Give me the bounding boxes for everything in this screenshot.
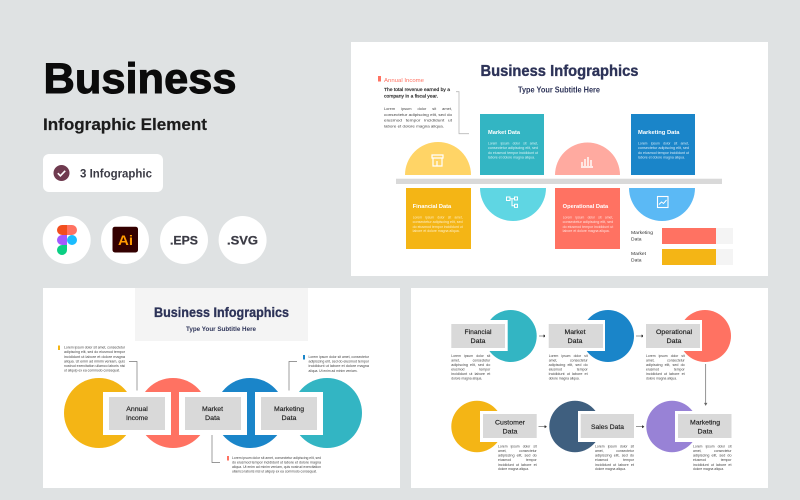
step: Market Data: amet, consectetur <box>549 358 589 362</box>
step: Financial Data: dolore magna aliqua. <box>451 377 482 381</box>
subheading: Type Your Subtitle Here <box>518 86 600 95</box>
note: bottom <box>227 456 321 474</box>
title: Business: Business <box>44 55 236 103</box>
card: Market Data: Market Data <box>488 130 521 136</box>
semicircle: sky with line chart icon <box>629 188 695 221</box>
arrow <box>636 426 644 428</box>
arrow: down <box>705 364 707 405</box>
step: Marketing Data <box>646 401 733 471</box>
card: Marketing Data: Marketing Data <box>638 130 680 136</box>
annual income note: eiusmod tempor incididunt ut <box>384 118 453 123</box>
box: Marketing Data: Data <box>282 415 297 422</box>
card: Marketing Data: consectetur adipiscing elit, sed <box>638 146 689 150</box>
box: Marketing Data: Marketing <box>274 406 304 413</box>
semicircle: yellow with shop icon <box>405 142 471 175</box>
card: Operational Data: Lorem ipsum dolor sit amet, <box>563 215 613 219</box>
card: Financial Data: do eiusmod tempor incididunt ut <box>413 225 463 229</box>
divider bar <box>396 179 722 184</box>
card: Financial Data: Financial Data <box>413 204 452 210</box>
annual income note: labore et dolore magna aliqua. <box>384 124 444 129</box>
card: Market Data <box>480 114 544 175</box>
step: Marketing Data: dolore magna aliqua. <box>693 467 724 471</box>
step: Market Data: adipiscing elit, sed do <box>549 363 588 367</box>
icon: Adobe Illustrator: Ai <box>118 232 133 248</box>
header block <box>135 288 308 341</box>
card: Marketing Data: do eiusmod tempor incididunt ut <box>638 151 689 155</box>
step: Market Data: Lorem ipsum dolor sit <box>549 354 588 358</box>
step: Operational Data: amet, consectetur <box>646 358 686 362</box>
note: upper right: incididunt ut labore et dolore magna <box>308 364 369 368</box>
badge: 3 Infographic: 3 Infographic <box>80 166 152 180</box>
card: Market Data: labore et dolore magna aliqua. <box>488 155 535 159</box>
step: Sales Data: amet, consectetur <box>595 449 635 453</box>
step: Customer Data: Data <box>502 428 518 436</box>
box: Annual Income: Annual <box>126 406 148 413</box>
card: Marketing Data <box>631 114 695 175</box>
circle: coral <box>138 378 208 448</box>
circle: teal <box>292 378 362 448</box>
step: Customer Data: incididunt ut labore et <box>498 463 537 467</box>
step: Customer Data <box>451 401 540 471</box>
arrow <box>636 335 644 337</box>
box: Annual Income: Income <box>126 415 148 422</box>
note: bottom: aliqua. Ut enim ad minim veniam, quis nostrud exercitation <box>232 465 321 469</box>
note: upper left: Lorem ipsum dolor sit amet, consectetur <box>64 346 126 350</box>
card: Financial Data: consectetur adipiscing elit, sed <box>413 220 463 224</box>
header block: Type Your Subtitle Here <box>186 326 256 333</box>
card: Market Data: do eiusmod tempor incididunt ut <box>488 151 538 155</box>
step: Sales Data <box>549 401 636 471</box>
card: Financial Data: labore et dolore magna aliqua. <box>413 229 460 233</box>
step: Financial Data: incididunt ut labore et <box>451 372 490 376</box>
circle: yellow <box>64 378 134 448</box>
note: bottom: ullamco laboris nisi ut aliquip ex ea commodo consequat. <box>232 470 317 474</box>
step: Market Data: dolore magna aliqua. <box>549 377 580 381</box>
step: Operational Data: Data <box>666 338 682 345</box>
annual income note: consectetur adipiscing elit, sed do <box>384 112 453 117</box>
bar chart: Marketing <box>631 230 653 235</box>
heading: Business Infographics <box>480 63 638 80</box>
card: Operational Data <box>555 188 620 249</box>
step: Customer Data: adipiscing elit, sed do <box>498 454 537 458</box>
step: Operational Data: dolore magna aliqua. <box>646 377 677 381</box>
card: Marketing Data: labore et dolore magna aliqua. <box>638 155 685 159</box>
annual income note: Annual Income <box>384 78 424 84</box>
step: Operational Data: Lorem ipsum dolor sit <box>646 354 685 358</box>
step: Marketing Data: Lorem ipsum dolor sit <box>693 444 732 448</box>
note: upper right: adipiscing elit, sed do eiusmod tempor <box>308 360 370 364</box>
annual income note: company in a fiscal year. <box>384 94 438 100</box>
step: Market Data: Data <box>568 338 583 345</box>
card: Financial Data: Lorem ipsum dolor sit amet, <box>413 215 463 219</box>
card: Marketing Data: Lorem ipsum dolor sit amet, <box>638 141 689 145</box>
connector lines <box>129 362 297 462</box>
note: upper left: adipiscing elit, sed do eiusmod tempor <box>64 350 126 354</box>
badge: 3 Infographic <box>43 154 163 192</box>
card: Market Data: consectetur adipiscing elit, sed <box>488 146 538 150</box>
card: Financial Data <box>406 188 471 249</box>
step: Sales Data: incididunt ut labore et <box>595 463 634 467</box>
bar chart <box>631 228 733 265</box>
step: Market Data <box>545 310 634 381</box>
icon: EPS: .EPS <box>170 234 198 248</box>
box: Market Data: Data <box>205 415 220 422</box>
card: Operational Data: labore et dolore magna aliqua. <box>563 229 610 233</box>
icon: SVG <box>219 216 267 264</box>
step: Sales Data: Sales Data <box>591 424 624 431</box>
step: Sales Data: eiusmod tempor <box>595 458 635 462</box>
step: Operational Data: eiusmod tempor <box>646 368 686 372</box>
step: Market Data: eiusmod tempor <box>549 368 589 372</box>
note: upper left: aliqua. Ut enim ad minim veniam, quis <box>64 360 125 364</box>
panel: linked circles infographic <box>43 288 400 488</box>
note: upper left <box>58 346 126 372</box>
step: Customer Data: Lorem ipsum dolor sit <box>498 444 537 448</box>
box: Market Data <box>179 392 247 435</box>
step: Customer Data: dolore magna aliqua. <box>498 467 529 471</box>
note: upper left: nostrud exercitation ullamco laboris nisi <box>64 364 125 368</box>
step: Sales Data: Lorem ipsum dolor sit <box>595 444 634 448</box>
step: Customer Data: Customer <box>495 420 526 426</box>
note: upper right <box>303 355 370 373</box>
step: Marketing Data: Data <box>698 428 713 436</box>
step: Marketing Data: adipiscing elit, sed do <box>693 454 732 458</box>
step: Financial Data: adipiscing elit, sed do <box>451 363 490 367</box>
arrow <box>539 335 546 337</box>
step: Marketing Data: eiusmod tempor <box>693 458 732 462</box>
icon: EPS <box>160 216 208 264</box>
step: Financial Data: amet, consectetur <box>451 358 491 362</box>
annual income note <box>378 76 453 129</box>
step: Sales Data: adipiscing elit, sed do <box>595 454 634 458</box>
step: Operational Data <box>643 310 731 381</box>
note: bottom: do eiusmod tempor incididunt ut labore et dolore magna <box>232 460 321 464</box>
icon: Figma <box>43 216 91 264</box>
box: Market Data: Market <box>202 406 223 413</box>
step: Market Data: Market <box>564 329 586 336</box>
bar chart: Data <box>631 236 642 242</box>
icon: Adobe Illustrator <box>101 216 149 264</box>
panel: process flow infographic <box>411 288 768 488</box>
annual income note: Lorem ipsum dolor sit amet, <box>384 106 452 111</box>
note: upper right: aliqua. Ut enim ad minim veniam. <box>308 369 358 373</box>
step: Sales Data: dolore magna aliqua. <box>595 467 626 471</box>
step: Operational Data: incididunt ut labore et <box>646 372 685 376</box>
note: upper right: Lorem ipsum dolor sit amet, consectetur <box>308 355 370 359</box>
step: Marketing Data: incididunt ut labore et <box>693 463 732 467</box>
card: Market Data: Lorem ipsum dolor sit amet, <box>488 141 538 145</box>
header block: Business Infographics <box>154 305 289 320</box>
step: Financial Data: eiusmod tempor <box>451 368 491 372</box>
step: Customer Data: amet, consectetur <box>498 449 538 453</box>
bar chart: Data <box>631 258 642 262</box>
step: Customer Data: eiusmod tempor <box>498 458 538 462</box>
box: Marketing Data <box>255 392 323 435</box>
annual income note: The total revenue earned by a <box>384 87 450 93</box>
arrow <box>538 426 547 428</box>
bar chart: Market <box>631 251 647 256</box>
subtitle: Infographic Element: Infographic Element <box>43 115 207 134</box>
step: Marketing Data: amet, consectetur <box>693 449 732 453</box>
step: Operational Data: adipiscing elit, sed do <box>646 363 685 367</box>
step: Operational Data: Operational <box>656 329 693 336</box>
card: Operational Data: do eiusmod tempor incididunt ut <box>563 225 613 229</box>
step: Financial Data: Financial <box>464 329 492 336</box>
card: Operational Data: consectetur adipiscing elit, sed <box>563 220 613 224</box>
note: upper left: ut aliquip ex ea commodo consequat. <box>64 368 120 372</box>
card: Operational Data: Operational Data <box>563 204 609 210</box>
semicircle: pink with bar icon <box>555 142 620 175</box>
panel: top infographic <box>351 42 768 276</box>
note: upper left: incididunt ut labore et dolore magna <box>64 355 125 359</box>
circle: blue <box>215 378 285 448</box>
note: bottom: Lorem ipsum dolor sit amet, consectetur adipiscing elit, sed <box>232 456 321 460</box>
icon: SVG: .SVG <box>227 234 258 248</box>
box: Annual Income <box>103 392 171 435</box>
step: Financial Data: Data <box>470 338 486 345</box>
step: Financial Data: Lorem ipsum dolor sit <box>451 354 490 358</box>
step: Market Data: incididunt ut labore et <box>549 372 588 376</box>
step: Marketing Data: Marketing <box>690 420 720 426</box>
step: Financial Data <box>447 310 537 381</box>
semicircle: cyan with hierarchy icon <box>480 188 546 221</box>
